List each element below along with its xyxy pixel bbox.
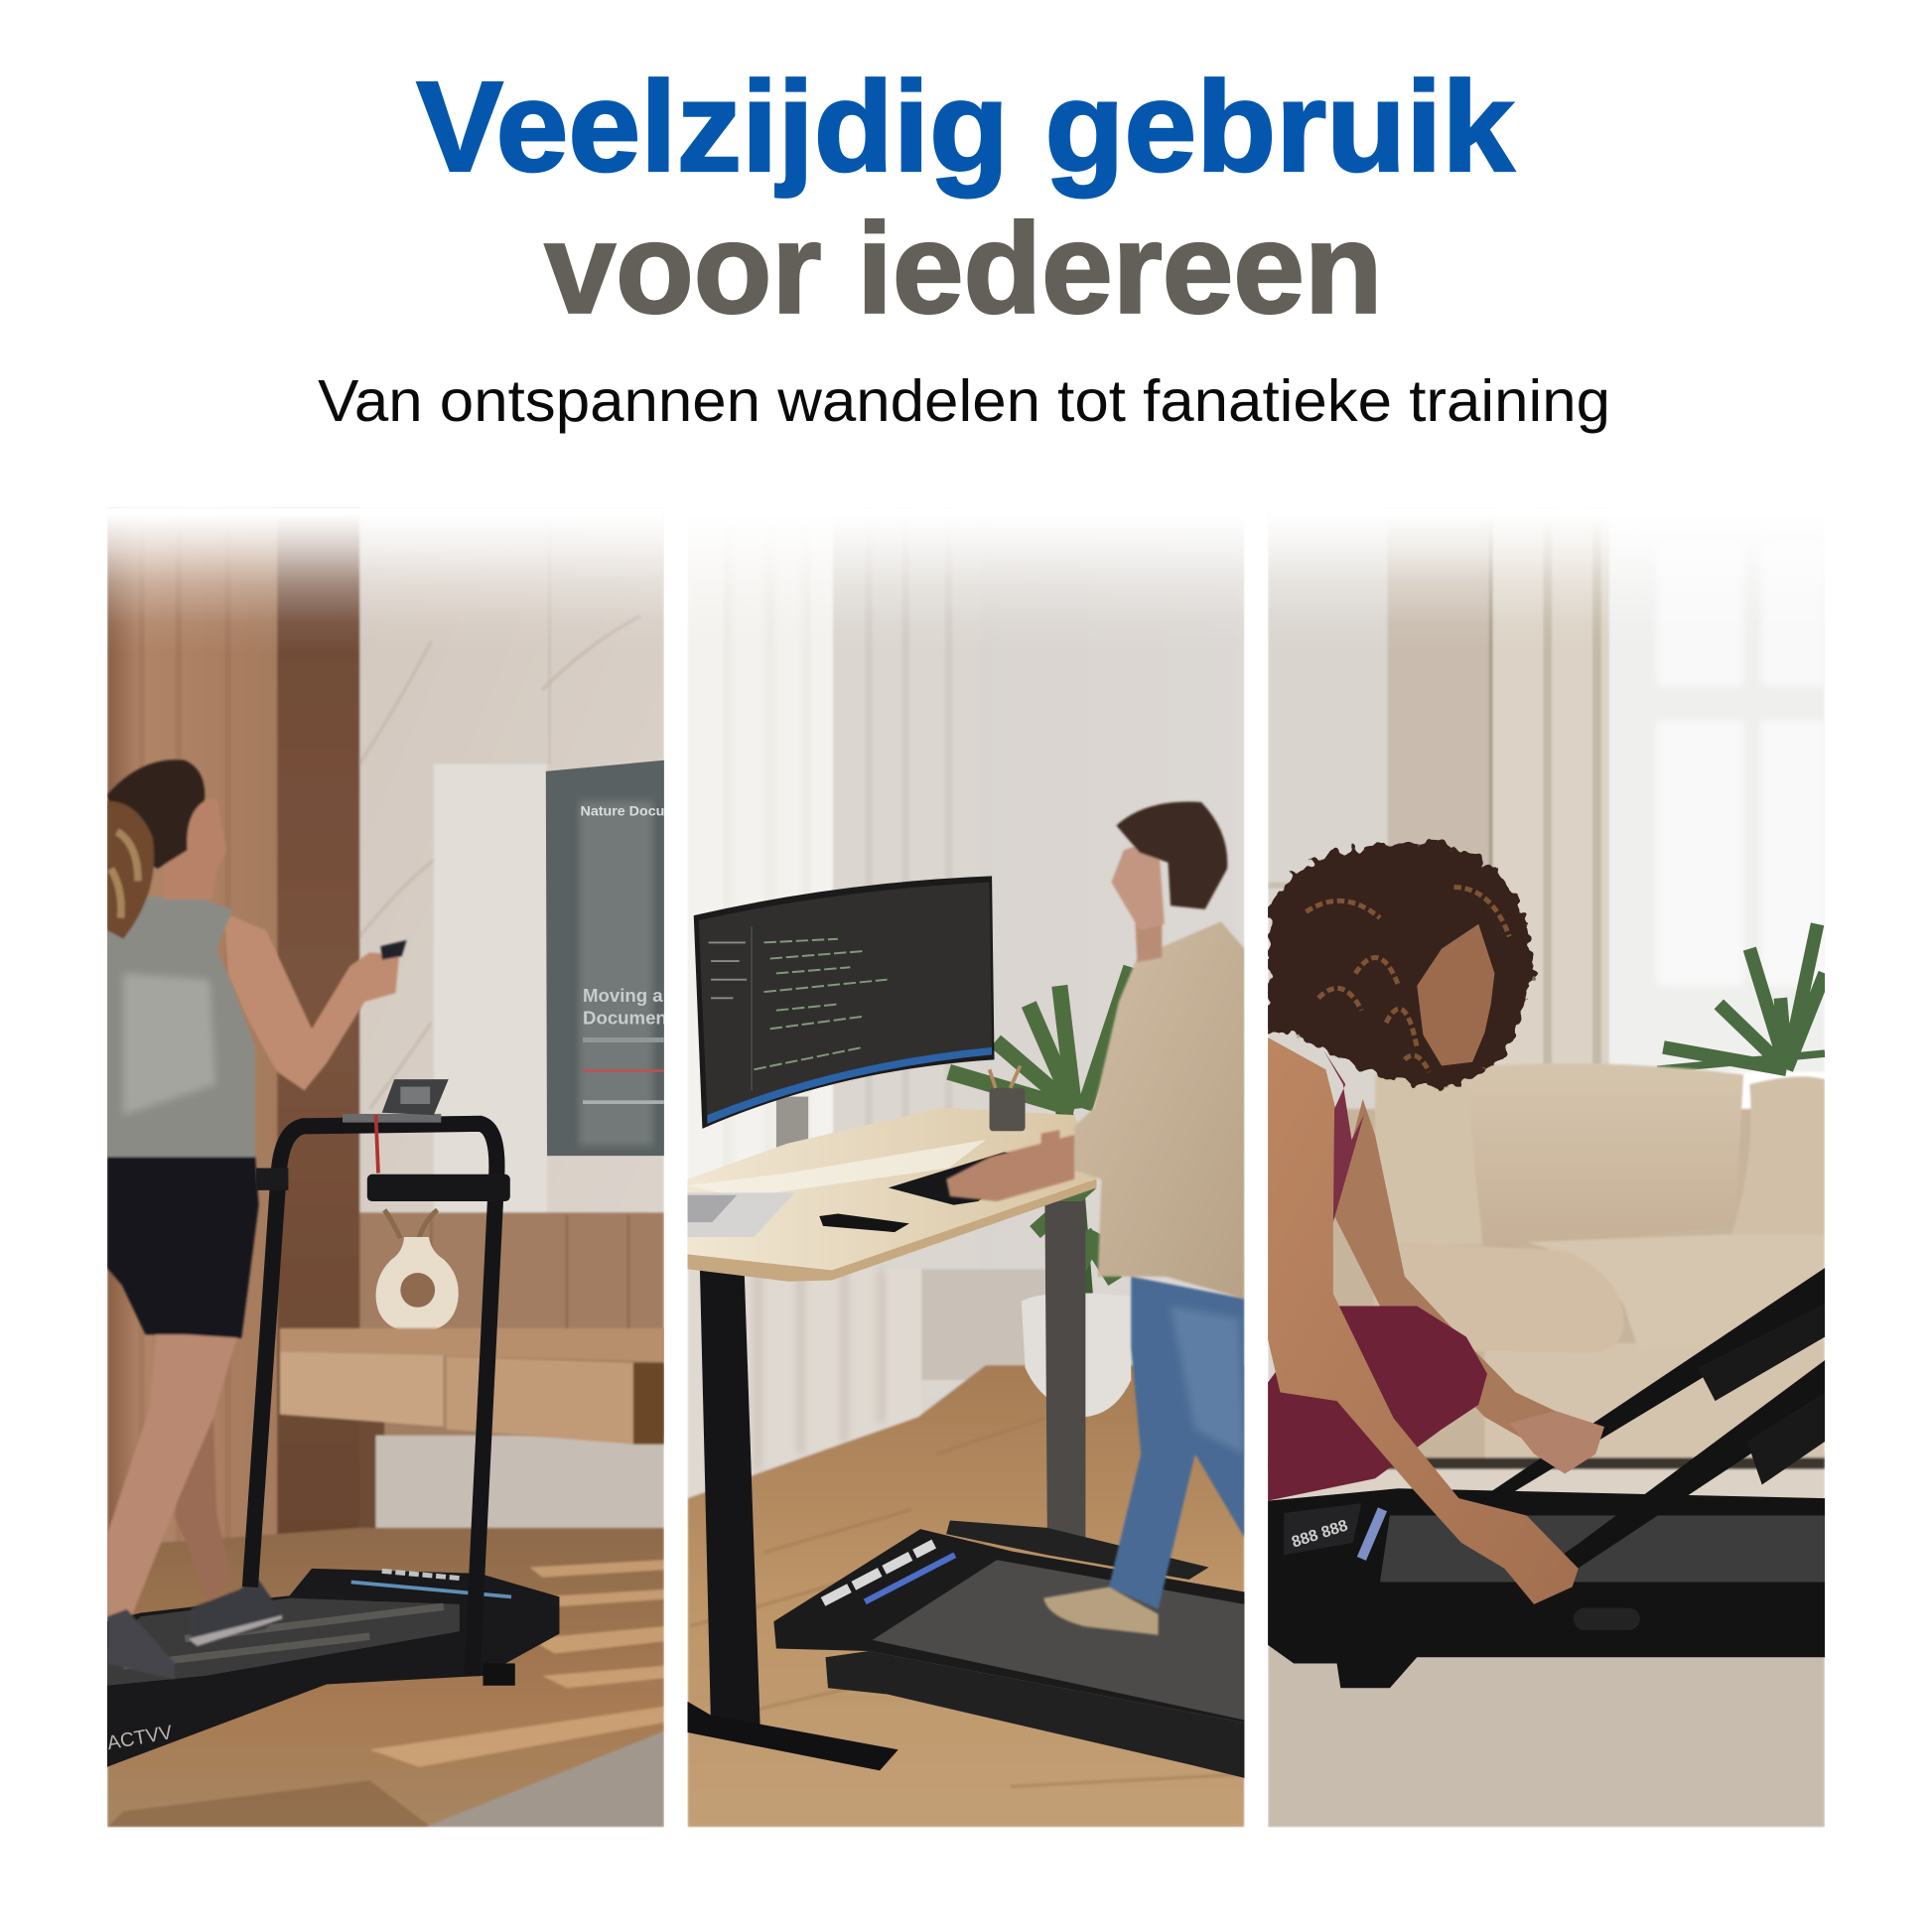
potted plant (949, 967, 1131, 1417)
panel: walking while watching TV (105, 499, 685, 1828)
treadmill base (1268, 1488, 1825, 1688)
woman folding the treadmill (1268, 843, 1604, 1604)
top fade (687, 508, 1245, 613)
treadmill base: 888 888 (1290, 1516, 1350, 1552)
panel: walking at a standing desk (688, 499, 1244, 1828)
sideboard (280, 1328, 664, 1445)
TV screen: Moving a N (583, 985, 681, 1006)
room background (1268, 499, 1825, 1828)
panel: folding the treadmill (1268, 499, 1825, 1828)
folding rails (1492, 1268, 1825, 1569)
top fade (1268, 508, 1825, 623)
treadmill deck (105, 1569, 559, 1767)
woman with remote (107, 759, 407, 1680)
TV screen (546, 760, 664, 1156)
TV screen: Documentn (583, 1007, 684, 1028)
vase on sideboard (376, 1210, 459, 1333)
room background (688, 499, 1244, 1828)
man at desk (946, 801, 1244, 1635)
desk legs (688, 1201, 1208, 1770)
sofa (1268, 1063, 1825, 1468)
subtitle: Van ontspannen wandelen tot fanatieke training (318, 367, 1610, 434)
curved monitor (693, 876, 995, 1148)
treadmill deck: ACTVV (105, 1722, 175, 1754)
treadmill (773, 1529, 1244, 1778)
treadmill handle frame (250, 1079, 510, 1676)
desk top (688, 1108, 1097, 1282)
desk accessories (688, 1066, 1034, 1237)
TV screen: Nature Docume (581, 804, 685, 820)
plant by the window (1657, 924, 1825, 1069)
top fade (107, 507, 664, 636)
title line 2: voor iedereen (545, 198, 1382, 341)
room background (107, 499, 664, 1828)
title line 1: Veelzijdig gebruik (416, 56, 1514, 199)
